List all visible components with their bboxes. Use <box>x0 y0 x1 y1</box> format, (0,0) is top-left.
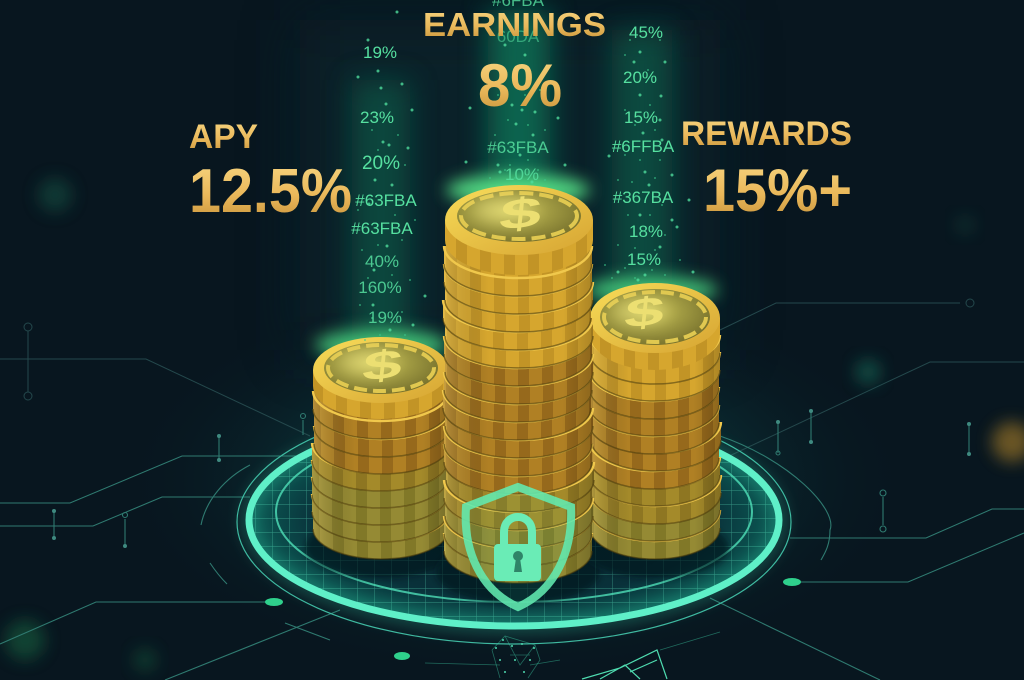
dollar sign: $ <box>622 288 667 337</box>
icon: shield with padlock <box>466 487 571 607</box>
percent readings: right column: 15% <box>627 250 661 269</box>
percent readings: right column: 15% <box>624 108 658 127</box>
small particles <box>358 40 680 340</box>
value: 15%+ <box>703 157 852 224</box>
rising data particles <box>358 12 693 340</box>
stat: APY <box>189 118 352 226</box>
stat: rewards <box>681 115 852 224</box>
bottom network fragments <box>425 632 720 679</box>
dollar sign: $ <box>497 188 544 240</box>
coin stack: right <box>589 283 721 559</box>
label: EARNINGS <box>423 6 606 43</box>
percent readings: left column: 40% <box>365 252 399 271</box>
percent readings: left column <box>351 43 417 327</box>
percent readings: right column: 45% <box>629 23 663 42</box>
percent readings: middle column <box>487 0 549 184</box>
label: APY <box>189 118 258 156</box>
percent readings: right column: #6FFBA <box>612 137 675 156</box>
large particles <box>358 12 693 330</box>
thin outer ring <box>237 400 791 644</box>
percent readings: left column: #63FBA <box>355 191 417 210</box>
label: REWARDS <box>681 115 852 153</box>
percent readings: right column: #367BA <box>613 188 674 207</box>
percent readings: middle column: #63FBA <box>487 138 549 157</box>
percent readings: middle column: 10% <box>505 165 539 184</box>
stat: earnings <box>423 6 606 119</box>
percent readings: left column: 23% <box>360 108 394 127</box>
value: 12.5% <box>189 157 352 226</box>
circuit lines <box>0 299 1024 680</box>
background <box>236 0 794 506</box>
percent readings: right column: 18% <box>629 222 663 241</box>
glow above coin stacks <box>315 174 718 361</box>
coin stack: middle <box>443 185 594 583</box>
platform: floor with grid <box>237 400 791 644</box>
platform: glowing ring <box>249 414 779 626</box>
percent readings: right column: 20% <box>623 68 657 87</box>
percent readings: left column: 20% <box>362 153 400 174</box>
percent readings: left column: 19% <box>368 308 402 327</box>
value: 8% <box>478 52 562 119</box>
stack shadows on floor <box>305 518 729 604</box>
percent readings: middle column: 60DA <box>497 27 540 46</box>
connector node dots <box>265 578 801 660</box>
percent readings: left column: 160% <box>358 278 402 297</box>
percent readings: left column: 19% <box>363 43 397 62</box>
percent readings: left column: #63FBA <box>351 219 413 238</box>
percent readings: right column <box>612 23 675 269</box>
ambient glow spots <box>5 178 1024 672</box>
coin stack: left <box>312 337 450 559</box>
dollar sign: $ <box>360 341 405 390</box>
